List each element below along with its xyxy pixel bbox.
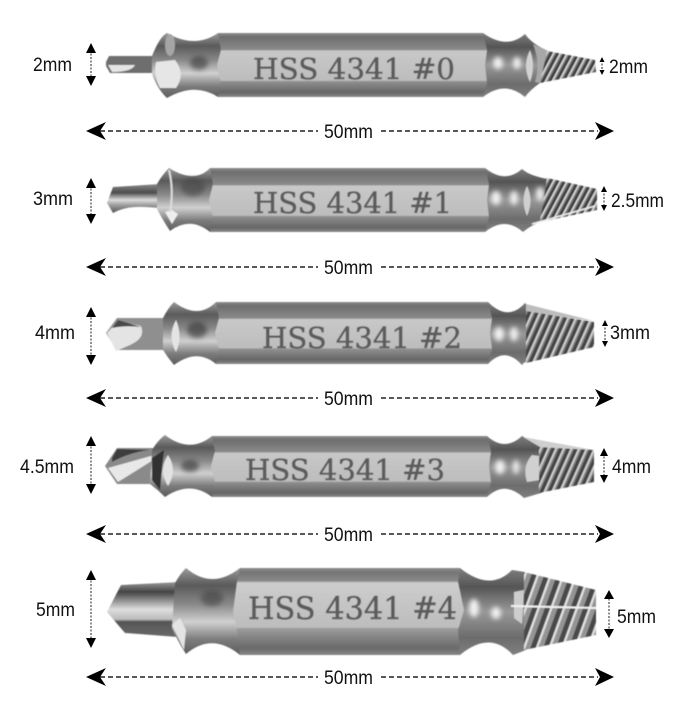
right diameter 3mm: 3mm [610, 322, 650, 344]
length dimension 1: 50mm [324, 257, 373, 279]
bit 1 engraving: HSS 4341 #1 [253, 186, 452, 220]
left diameter 4.5mm [20, 436, 96, 494]
bit 2 right highlights [494, 327, 518, 341]
bit 0 right facet [526, 50, 533, 82]
bit 3 flutes [539, 447, 594, 493]
bit 2 flutes [526, 311, 594, 363]
bit 2 left neck shade [187, 322, 207, 338]
left diameter 4.5mm: 4.5mm [20, 456, 74, 478]
bit 4 drill tip [107, 582, 180, 637]
bit 4 right highlights [469, 599, 501, 619]
bit 1 hex shank [209, 168, 489, 232]
length dimension 4 [86, 667, 614, 689]
bit 1 flutes [540, 178, 597, 222]
left diameter 2mm: 2mm [33, 54, 72, 76]
bit 1 left neck shade [181, 178, 205, 196]
bit 3 left neck shade [181, 460, 199, 472]
right diameter 4mm: 4mm [612, 456, 651, 478]
bit 4 hex shank [233, 568, 464, 655]
left diameter 5mm: 5mm [36, 599, 75, 621]
right diameter 2.5mm: 2.5mm [611, 190, 664, 212]
bit 4 flute edge [511, 606, 596, 608]
bit 2 left neck [163, 302, 222, 365]
bit 2 thread top [526, 304, 594, 321]
bit 4 left shade [201, 590, 223, 606]
bit 0 left neck [152, 33, 224, 98]
bit 1 left collar edge [169, 170, 172, 212]
bit 0 left collar facet [165, 34, 175, 56]
bit 4 [107, 568, 596, 655]
bit 3 drill tip [105, 448, 155, 484]
bit 4 right neck [455, 568, 526, 655]
bit 3 thread top [523, 437, 594, 450]
bit 3 tip highlight [108, 452, 165, 482]
bit 2 tip face [107, 321, 142, 351]
right diameter 5mm [604, 590, 656, 638]
bit 2 left facet [172, 320, 180, 352]
bit 3 left neck [150, 435, 218, 497]
bit 0 shoulder [533, 44, 548, 83]
bit 4 left facet [172, 618, 186, 650]
bit 0 hex shank [217, 33, 487, 97]
bit 0 left facet [155, 60, 181, 88]
bit 1 drill tip [107, 184, 160, 213]
bit 4 engraving: HSS 4341 #4 [248, 591, 457, 627]
right diameter 3mm [602, 320, 650, 347]
bit 3 left dark facet [152, 450, 164, 490]
bit 3 [105, 435, 594, 498]
length dimension 0: 50mm [324, 121, 373, 143]
bit 4 right facet [514, 590, 524, 624]
bit 3 engraving: HSS 4341 #3 [245, 453, 445, 487]
length dimension 3: 50mm [324, 524, 373, 546]
length dimension 3 [86, 524, 614, 546]
length dimension 4: 50mm [324, 667, 373, 689]
bit 0 right highlights [493, 57, 521, 69]
length dimension 2: 50mm [324, 388, 373, 410]
bit 1 right facet [524, 186, 530, 216]
bit 0 left neck shade [190, 56, 208, 70]
bit 1 flute edge [532, 206, 595, 224]
right diameter 4mm [600, 448, 651, 483]
length dimension 0 [86, 121, 614, 143]
bit 3 tip dark flute [112, 449, 150, 462]
bit 1 left facet [165, 210, 178, 224]
bit 0 flutes [540, 51, 596, 83]
bit 2 drill tip [106, 318, 166, 350]
length dimension 1 [86, 257, 614, 279]
bit 0 tip highlight [108, 65, 135, 72]
bit 3 right facet [525, 455, 540, 482]
bit 1 right highlights [491, 187, 544, 205]
right diameter 2mm: 2mm [609, 56, 648, 78]
left diameter 2mm [33, 43, 96, 86]
right diameter 5mm: 5mm [617, 606, 656, 628]
bit 2 [106, 302, 594, 365]
bit 1 [107, 168, 597, 232]
left diameter 3mm [33, 178, 96, 224]
left diameter 3mm: 3mm [33, 188, 73, 210]
bit 3 right neck [482, 436, 541, 498]
left diameter 4mm [35, 307, 96, 365]
bit 4 flutes [524, 572, 596, 650]
right diameter 2.5mm [601, 186, 664, 212]
bit 0 drill tip [106, 56, 155, 73]
length dimension 2 [86, 388, 614, 410]
bit 1 right neck [480, 168, 548, 232]
bit 3 hex shank [211, 436, 491, 497]
bit 4 left neck [172, 568, 246, 655]
bit 1 left neck [157, 168, 216, 232]
bit 0 right neck [478, 33, 548, 97]
bit 3 right highlights [495, 460, 519, 474]
bit 2 engraving: HSS 4341 #2 [262, 321, 462, 355]
bit 2 tip dark flute [112, 320, 141, 328]
left diameter 5mm [36, 570, 96, 648]
bit 0 engraving: HSS 4341 #0 [253, 52, 455, 86]
bit 2 right neck [483, 302, 536, 365]
bit 2 hex shank [215, 302, 492, 364]
left diameter 4mm: 4mm [35, 322, 75, 344]
bit 3 left facet [163, 455, 173, 486]
bit 0 [106, 33, 596, 98]
